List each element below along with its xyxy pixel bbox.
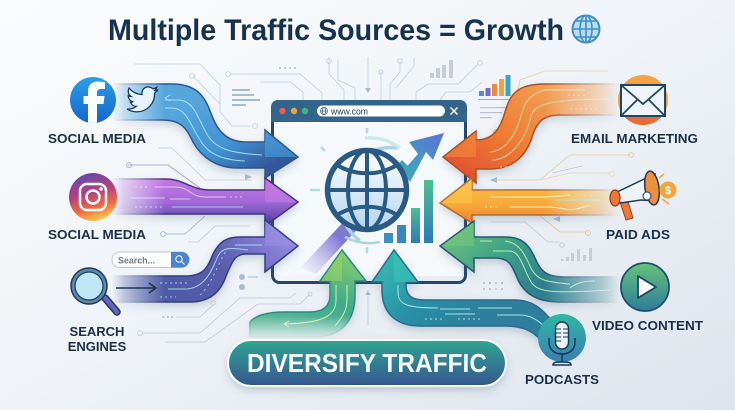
window control dots (279, 108, 308, 114)
icon: grey bars lower right (561, 248, 592, 261)
label: paid ads: PAID ADS (606, 227, 670, 242)
arrow: facebook and twitter band (112, 84, 298, 178)
arrow: email band (443, 84, 620, 183)
label: search engines (68, 324, 127, 354)
close icon (450, 108, 458, 114)
arrow: instagram band (112, 178, 298, 226)
icon: globe (328, 150, 406, 230)
icon: play (621, 263, 669, 311)
icon: ring around globe (310, 128, 400, 253)
icon: email (618, 75, 668, 125)
icon: podcast microphone (538, 314, 586, 365)
small list lines (232, 89, 260, 106)
arrow: search to band (116, 283, 156, 293)
address bar (317, 106, 445, 118)
label: social media 2: SOCIAL MEDIA (48, 227, 147, 242)
icon: megaphone (610, 170, 676, 220)
title: Multiple Traffic Sources = Growth (108, 14, 564, 47)
icon: grey bar chart (430, 60, 453, 78)
arrow: podcast band (372, 250, 555, 345)
icon: coloured bar chart (478, 75, 511, 118)
address bar: www.com (330, 106, 368, 118)
icon: twitter bird (127, 87, 158, 112)
arrow: paid ads band (440, 178, 620, 223)
label: search engines: ENGINES (68, 339, 127, 354)
icon: magnifying glass (71, 268, 117, 312)
search box (112, 252, 189, 268)
arrow: video band (440, 221, 620, 302)
panel: browser window (271, 100, 467, 282)
icon: facebook (70, 77, 116, 123)
circuit lines (127, 57, 633, 342)
icon: megaphone: $ (665, 185, 671, 197)
icon: bar chart in window (384, 180, 433, 243)
arrow: search band (112, 220, 298, 302)
icon: title globe (572, 16, 600, 42)
rising growth arrow (300, 133, 444, 274)
icon: instagram (69, 173, 117, 221)
browser title bar (271, 100, 467, 122)
label: search engines: SEARCH (70, 324, 124, 339)
arrow: left upward band (250, 250, 366, 337)
label: podcasts: PODCASTS (525, 372, 599, 387)
search box: Search... (118, 256, 155, 266)
callout: diversify traffic (228, 340, 506, 386)
label: video content: VIDEO CONTENT (592, 318, 703, 333)
label: email marketing: EMAIL MARKETING (571, 131, 698, 146)
callout: diversify traffic: DIVERSIFY TRAFFIC (247, 348, 487, 378)
label: social media 1: SOCIAL MEDIA (48, 131, 147, 146)
decorative dots and small arrows (162, 67, 560, 318)
